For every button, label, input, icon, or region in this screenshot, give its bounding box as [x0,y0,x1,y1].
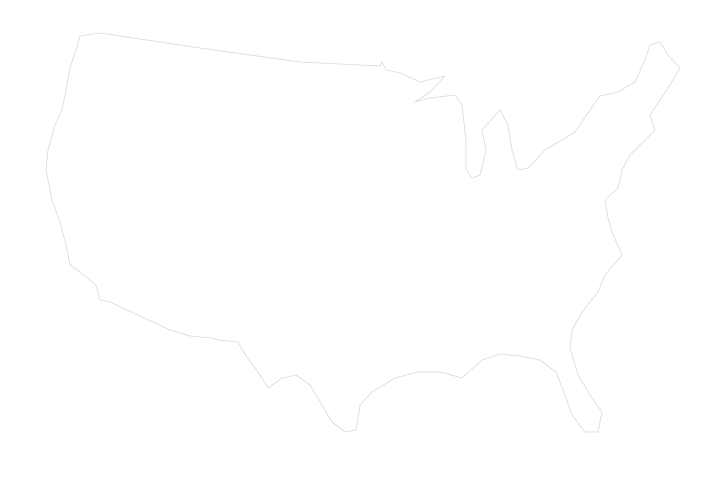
shape: US outline [46,33,680,432]
